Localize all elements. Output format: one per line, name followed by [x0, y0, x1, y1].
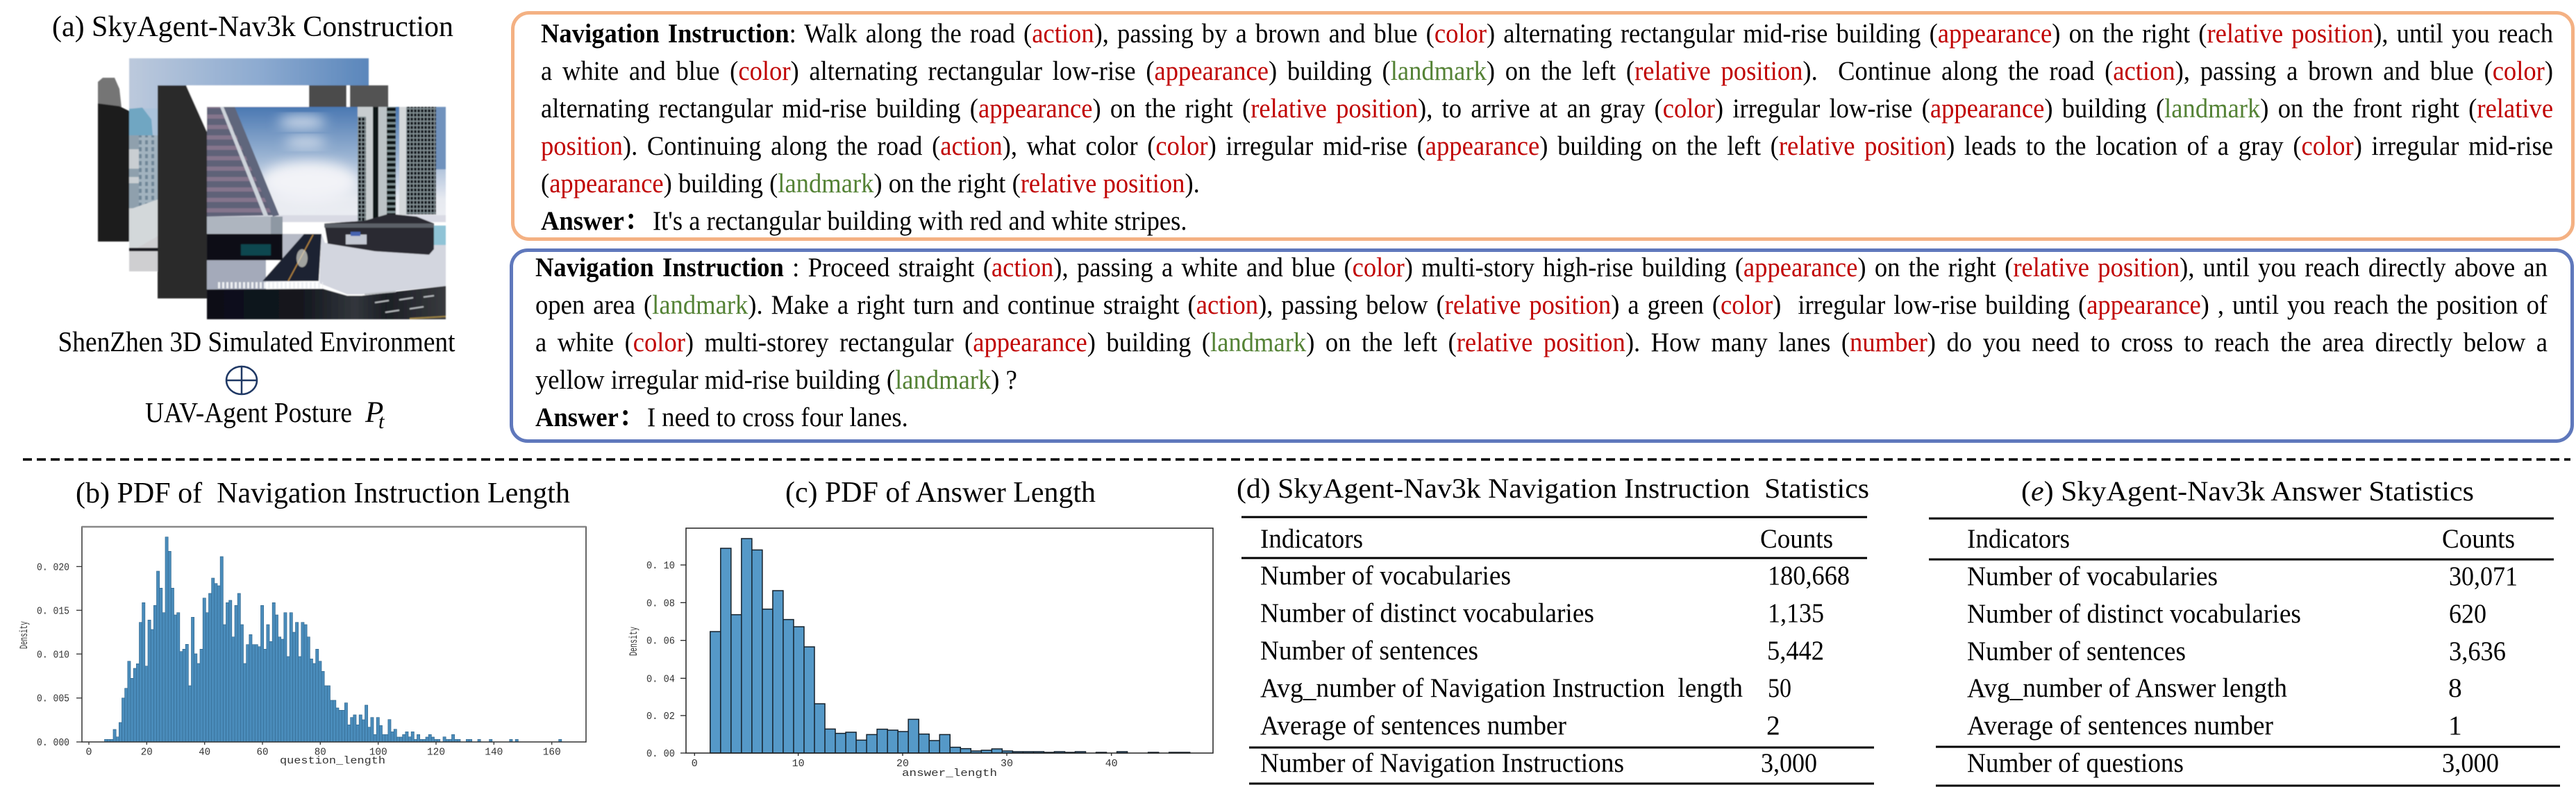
text: answer 2: Answer： — [535, 403, 644, 432]
panel: orange example box — [511, 11, 2575, 241]
row: sentences: Number of sentences — [1967, 636, 2186, 666]
text: navigation instruction 1 — [541, 19, 2553, 198]
row: average answer length: Avg_number of Answer length — [1967, 673, 2287, 703]
y axis labels: 0. 010 — [37, 650, 69, 661]
row: sentences — [1260, 635, 1824, 666]
x axis labels: 160 — [543, 747, 561, 758]
row: sentences: Number of sentences — [1260, 635, 1478, 666]
row: distinct vocabularies: 1,135 — [1768, 598, 1824, 628]
row: total questions — [1967, 747, 2499, 778]
x axis labels — [86, 747, 561, 758]
formula: P sub t: P — [365, 396, 383, 429]
icon: circled plus — [226, 366, 257, 394]
table (d): navigation instruction statistics — [1241, 517, 1874, 784]
row: number of vocabularies: 30,071 — [2449, 561, 2518, 591]
plot frame — [82, 527, 586, 742]
pyramid tower — [207, 107, 279, 217]
y axis title: Density — [628, 627, 640, 656]
view 4: front RGB view of city street — [207, 107, 446, 319]
panel (d) title: (d) SkyAgent-Nav3k Navigation Instruction Statistics — [1237, 473, 1869, 504]
row: average instruction length: Avg_number of Navigation Instruction length — [1260, 673, 1743, 703]
row: total questions: Number of questions — [1967, 747, 2184, 778]
row: total instructions — [1260, 747, 1817, 778]
row: total questions: 3,000 — [2442, 747, 2499, 778]
row: average sentences — [1260, 710, 1780, 741]
caption: ShenZhen 3D Simulated Environment: ShenZhen 3D Simulated Environment — [58, 326, 455, 357]
y axis labels: 0. 04 — [646, 673, 675, 686]
image stack: simulated environment views — [98, 58, 446, 319]
text: answer 1: Answer： — [541, 206, 649, 236]
row: distinct vocabularies — [1260, 598, 1824, 628]
text: navigation instruction 1: a white and blue (color) alternating rectangular low-rise (appearance) building (landmark) on the left (relative position). Continue along the road (action), passing a brown and blue (color) — [541, 56, 2553, 86]
row: sentences: 5,442 — [1767, 635, 1824, 666]
plot frame — [686, 528, 1213, 753]
foreground road — [207, 286, 446, 319]
row: total instructions: Number of Navigation Instructions — [1260, 747, 1624, 778]
x axis labels: 30 — [1001, 758, 1013, 770]
row: average sentences — [1967, 710, 2462, 741]
row: number of vocabularies: Number of vocabularies — [1260, 560, 1511, 591]
x axis labels: 60 — [257, 747, 268, 758]
text: answer 1: It's a rectangular building with red and white stripes. — [653, 206, 1187, 236]
row: average answer length: 8 — [2448, 673, 2462, 703]
x axis labels: 100 — [369, 747, 387, 758]
y axis labels — [646, 560, 675, 760]
right towers — [358, 107, 366, 117]
section divider — [23, 458, 2570, 461]
row: number of vocabularies: 180,668 — [1768, 560, 1850, 591]
panel (b) title: (b) PDF of Navigation Instruction Length — [76, 478, 570, 509]
row: average answer length — [1967, 673, 2462, 703]
panel (e) title: (e) SkyAgent-Nav3k Answer Statistics — [2021, 475, 2474, 507]
x axis title: answer_length — [902, 768, 997, 779]
row: distinct vocabularies — [1967, 598, 2486, 629]
y axis labels: 0. 020 — [37, 562, 69, 573]
text: navigation instruction 1: Navigation Instruction: Walk along the road (action), passing by a brown and blue (color) alternating rectangular mid-rise building (appearance) on the right (relative position), until you reach — [541, 19, 2553, 49]
table header row: Counts — [1760, 523, 1833, 554]
row: average sentences: 2 — [1766, 710, 1780, 741]
text: navigation instruction 1: position). Continuing along the road (action), what color (color) irregular mid-rise (appearance) building on the left (relative position) leads to the location of a gray (color) irregular mid-rise — [541, 131, 2553, 161]
text: navigation instruction 2: Navigation Instruction : Proceed straight (action), passing a white and blue (color) multi-story high-rise building (appearance) on the right (relative position), until you reach directly above an — [535, 253, 2548, 282]
y axis labels: 0. 005 — [37, 693, 69, 705]
caption: UAV-Agent Posture: UAV-Agent Posture — [145, 396, 352, 428]
row: sentences — [1967, 636, 2506, 666]
y axis labels — [37, 562, 69, 749]
chart (c): histogram of answer length — [628, 528, 1213, 779]
table header row: Counts — [2442, 523, 2515, 554]
table header row: Indicators — [1260, 523, 1363, 554]
view 2: RGB side view — [129, 58, 369, 271]
x axis labels: 140 — [485, 747, 503, 758]
y axis labels: 0. 015 — [37, 605, 69, 618]
low building — [324, 214, 434, 255]
x axis labels: 20 — [141, 747, 153, 758]
y axis labels: 0. 000 — [37, 737, 69, 749]
row: average sentences: 1 — [2448, 710, 2462, 741]
y axis labels: 0. 00 — [646, 748, 675, 760]
histogram bars — [105, 537, 562, 742]
formula: P sub t: t — [378, 410, 385, 433]
x axis labels — [692, 758, 1118, 770]
table (e): answer statistics — [1929, 518, 2560, 786]
x axis title: question_length — [280, 755, 385, 767]
text: navigation instruction 2: a white (color) multi-storey rectangular (appearance) building (landmark) on the left (relative position). How many lanes (number) do you need to cross to reach the area directly below a — [535, 328, 2548, 357]
panel (c) title: (c) PDF of Answer Length — [785, 477, 1096, 509]
chart (b): histogram of navigation instruction length — [18, 527, 586, 767]
x axis labels: 10 — [792, 758, 805, 770]
x axis labels: 20 — [896, 758, 909, 770]
text: navigation instruction 1: (appearance) building (landmark) on the right (relative position). — [541, 169, 1200, 198]
view 1: depth image — [98, 78, 129, 242]
x axis labels: 0 — [692, 758, 698, 770]
text: navigation instruction 2 — [535, 253, 2548, 395]
row: total instructions: 3,000 — [1761, 747, 1817, 778]
x axis labels: 120 — [427, 747, 445, 758]
row: number of vocabularies — [1967, 561, 2518, 591]
x axis labels: 40 — [199, 747, 210, 758]
row: distinct vocabularies: Number of distinct vocabularies — [1260, 598, 1594, 628]
x axis labels: 0 — [86, 747, 92, 758]
row: number of vocabularies: Number of vocabularies — [1967, 561, 2218, 591]
crosswalk — [218, 282, 323, 289]
ground and plaza — [207, 260, 266, 292]
y axis title: Density — [18, 621, 31, 649]
table header row: Indicators — [1967, 523, 2070, 554]
row: average instruction length: 50 — [1768, 673, 1791, 703]
y axis labels: 0. 10 — [646, 560, 675, 572]
x axis labels: 40 — [1105, 758, 1118, 770]
x axis labels: 80 — [315, 747, 326, 758]
row: average sentences: Average of sentences number — [1260, 710, 1566, 741]
text: navigation instruction 1: alternating rectangular mid-rise building (appearance) on the right (relative position), to arrive at an gray (color) irregular low-rise (appearance) building (landmark) on the front right (relative — [541, 94, 2553, 124]
y axis labels: 0. 02 — [646, 711, 675, 723]
view 3: depth image — [158, 85, 388, 298]
row: sentences: 3,636 — [2449, 636, 2506, 666]
y axis labels: 0. 08 — [646, 598, 675, 609]
table header row — [1967, 523, 2515, 554]
table header row — [1260, 523, 1833, 554]
text: answer 2: I need to cross four lanes. — [647, 403, 908, 432]
row: number of vocabularies — [1260, 560, 1850, 591]
row: average sentences: Average of sentences number — [1967, 710, 2273, 741]
row: distinct vocabularies: Number of distinct vocabularies — [1967, 598, 2301, 629]
text: navigation instruction 2: open area (landmark). Make a right turn and continue straight (action), passing below (relative position) a green (color) irregular low-rise building (appearance) , until you reach the position of — [535, 290, 2548, 320]
row: distinct vocabularies: 620 — [2449, 598, 2486, 629]
y axis labels: 0. 06 — [646, 636, 675, 647]
panel: blue example box — [510, 248, 2574, 443]
panel (a) title: (a) SkyAgent-Nav3k Construction — [52, 11, 453, 43]
text: navigation instruction 2: yellow irregular mid-rise building (landmark) ? — [535, 365, 1017, 395]
histogram bars — [710, 539, 1190, 753]
